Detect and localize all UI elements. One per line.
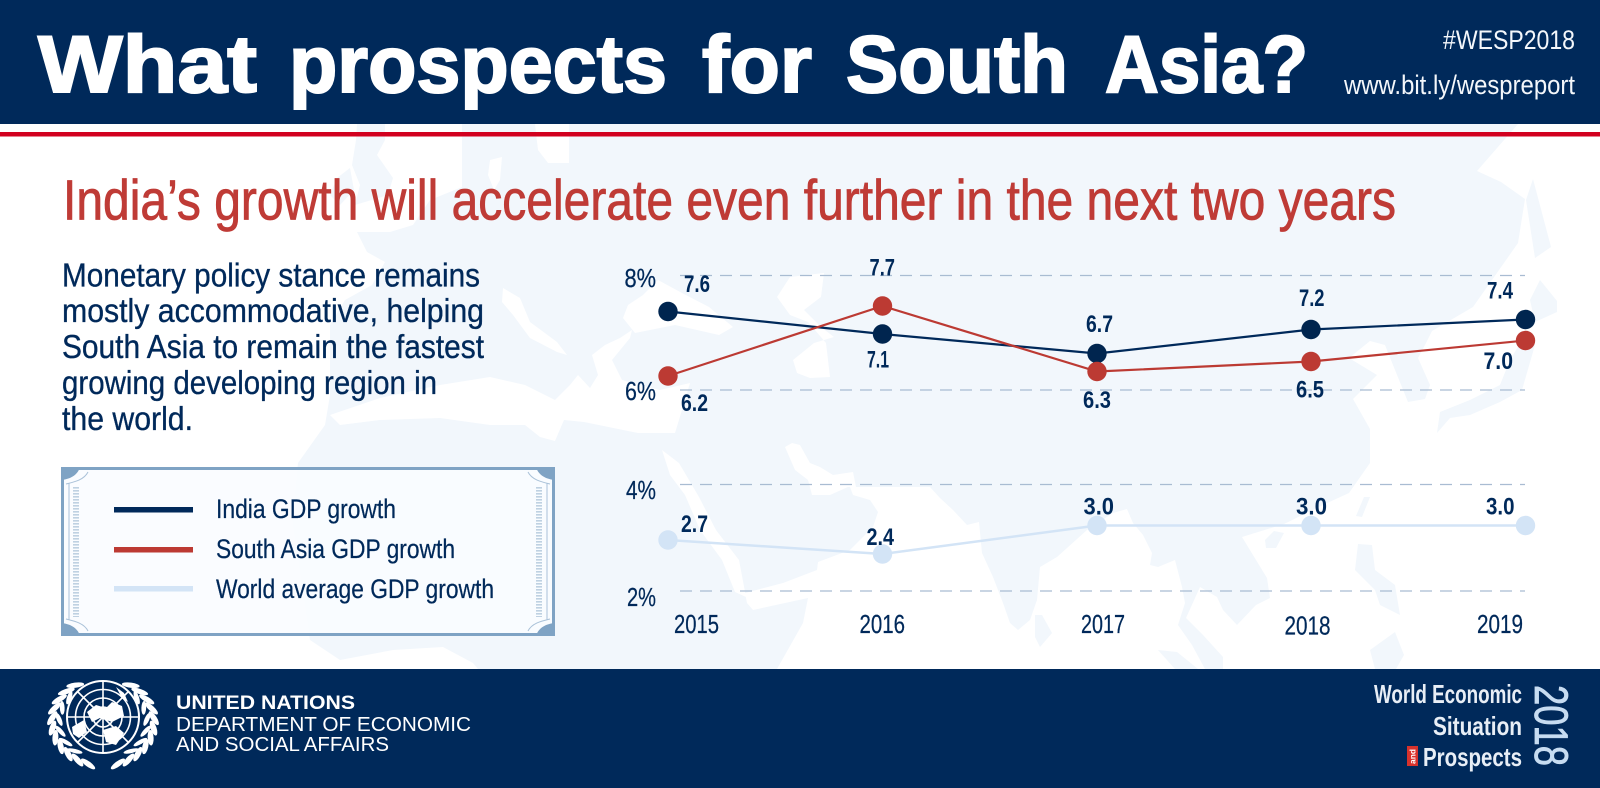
y axis labels: 4%: [626, 475, 656, 505]
hashtag: #WESP2018: [1443, 25, 1575, 55]
WESP logo: [1374, 679, 1578, 772]
x axis labels: 2017: [1081, 609, 1125, 639]
UN DESA wordmark: UNITED NATIONS: [176, 692, 355, 714]
icon: red "and" tag: [1407, 746, 1418, 766]
series: South Asia: 7.0: [1484, 348, 1513, 375]
title: prospects: [289, 20, 667, 110]
subtitle heading: India’s growth will accelerate even further in the next two years: [63, 168, 1396, 232]
series: world average: 3.0: [1084, 494, 1114, 520]
legend item: India: India GDP growth: [216, 494, 396, 524]
UN DESA wordmark: AND SOCIAL AFFAIRS: [176, 734, 389, 756]
series: India: 7.1: [867, 346, 889, 374]
series: India: 7.2: [1299, 285, 1324, 312]
series: world average: [658, 494, 1535, 564]
body text block: the world.: [62, 400, 193, 437]
icon: red "and" tag: and: [1408, 749, 1418, 764]
series: world average: 2.7: [681, 511, 708, 538]
x axis labels: 2019: [1477, 609, 1523, 639]
year 2018 vertical: 2018: [1525, 685, 1578, 766]
WESP logo: Prospects: [1423, 742, 1522, 772]
y axis labels: 2%: [627, 582, 656, 612]
y axis labels: 6%: [625, 376, 656, 406]
y axis labels: [624, 263, 656, 612]
body text block: mostly accommodative, helping: [62, 292, 484, 329]
series: world average: 2.4: [866, 524, 895, 551]
WESP logo: Situation: [1433, 711, 1522, 741]
series: South Asia: 6.2: [681, 390, 708, 417]
x axis labels: 2016: [860, 609, 905, 639]
legend item: South Asia: South Asia GDP growth: [216, 534, 455, 564]
legend item: World: World average GDP growth: [216, 574, 494, 604]
title: What: [38, 20, 257, 110]
title: [38, 20, 1308, 110]
body text block: Monetary policy stance remains: [62, 256, 480, 294]
series: India: 7.6: [684, 271, 710, 298]
series: India: [658, 271, 1535, 374]
series: India: 7.4: [1487, 278, 1513, 304]
x axis labels: 2018: [1284, 610, 1330, 640]
UN DESA wordmark: [176, 692, 471, 756]
x axis labels: 2015: [674, 609, 719, 639]
title: Asia?: [1105, 20, 1308, 110]
legend item: World: [114, 574, 494, 604]
title: South: [846, 20, 1068, 110]
WESP logo: World Economic: [1374, 679, 1522, 709]
UN DESA wordmark: DEPARTMENT OF ECONOMIC: [176, 714, 471, 736]
series: South Asia: 7.7: [870, 254, 895, 282]
title: for: [702, 20, 812, 110]
body text block: [62, 256, 484, 437]
header band: [0, 0, 1600, 124]
series: world average: 3.0: [1296, 494, 1327, 520]
series: South Asia: 6.5: [1296, 376, 1324, 404]
legend item: India: [114, 494, 396, 524]
line chart: [624, 254, 1535, 640]
legend item: South Asia: [114, 534, 455, 564]
report url: www.bit.ly/wespreport: [1343, 70, 1575, 100]
footer band: [0, 669, 1600, 788]
series: world average: 3.0: [1486, 494, 1514, 520]
background world map: [292, 124, 1557, 669]
body text block: growing developing region in: [62, 364, 437, 401]
red divider: [0, 132, 1600, 136]
y axis labels: 8%: [624, 263, 656, 293]
series: South Asia: 6.3: [1083, 387, 1111, 414]
x axis labels: [674, 609, 1523, 640]
series: South Asia: [658, 254, 1535, 417]
body text block: South Asia to remain the fastest: [62, 328, 484, 365]
series: India: 6.7: [1086, 311, 1113, 338]
panel: legend: [61, 467, 555, 636]
icon: UN emblem: [45, 681, 161, 771]
